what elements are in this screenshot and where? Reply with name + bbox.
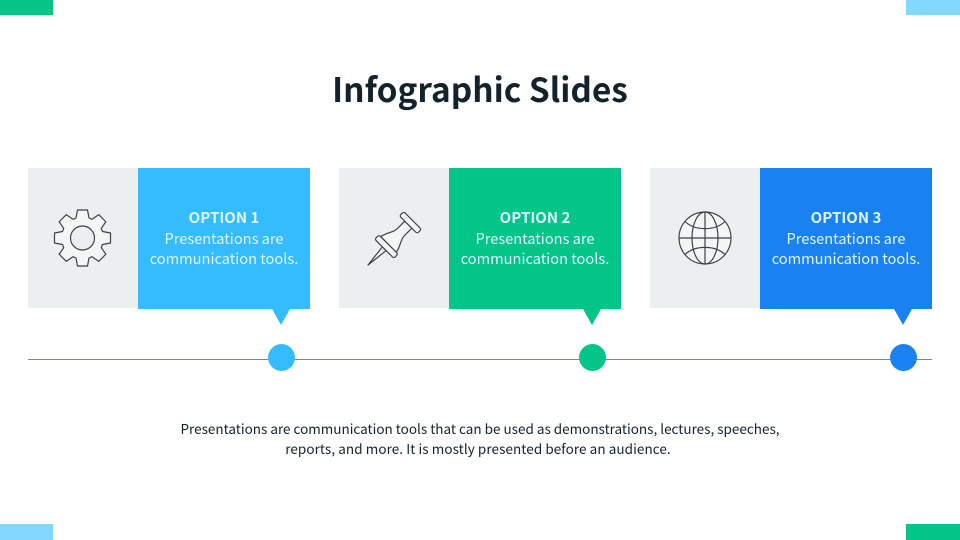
text: option 3: [772, 228, 920, 269]
corner: top right: [906, 0, 960, 15]
description text: Presentations are communication tools that can be used as demonstrations, lectures, speeches,: [180, 418, 780, 438]
icon panel: gear: [28, 168, 138, 308]
text: option 1: communication tools.: [150, 248, 298, 269]
text: option 2: Presentations are: [476, 228, 594, 249]
marker: option 3: [890, 344, 916, 371]
icon: gear: [54, 209, 112, 267]
text: option 3: Presentations are: [787, 228, 905, 249]
panel: option 1: [28, 168, 310, 371]
heading: option 1: OPTION 1: [189, 207, 259, 228]
pointer: option 1: [272, 309, 290, 325]
text: option 1: [150, 228, 298, 269]
card: option 3: [760, 168, 932, 309]
heading: option 2: OPTION 2: [500, 207, 570, 228]
icon panel: globe: [650, 168, 760, 308]
panel: option 3: [650, 168, 932, 371]
marker: option 2: [578, 344, 606, 371]
description text: reports, and more. It is mostly presented before an audience.: [285, 438, 671, 458]
icon: push pin: [367, 212, 422, 266]
description text: [180, 418, 780, 458]
corner: top left: [0, 0, 53, 15]
panel: option 2: [339, 168, 621, 371]
pointer: option 2: [583, 309, 601, 325]
corner: bottom left: [0, 524, 53, 540]
card: option 1: [138, 168, 310, 309]
text: option 2: communication tools.: [461, 248, 609, 269]
text: option 2: [461, 228, 609, 269]
timeline line: [28, 359, 932, 360]
heading: option 3: OPTION 3: [811, 207, 881, 228]
icon panel: pin: [339, 168, 449, 308]
text: option 1: Presentations are: [165, 228, 283, 249]
icon: globe: [678, 211, 732, 265]
corner: bottom right: [906, 524, 960, 540]
card: option 2: [449, 168, 621, 309]
pointer: option 3: [894, 309, 912, 325]
marker: option 1: [268, 344, 294, 371]
text: option 3: communication tools.: [772, 248, 920, 269]
title: Infographic Slides: [332, 63, 628, 112]
